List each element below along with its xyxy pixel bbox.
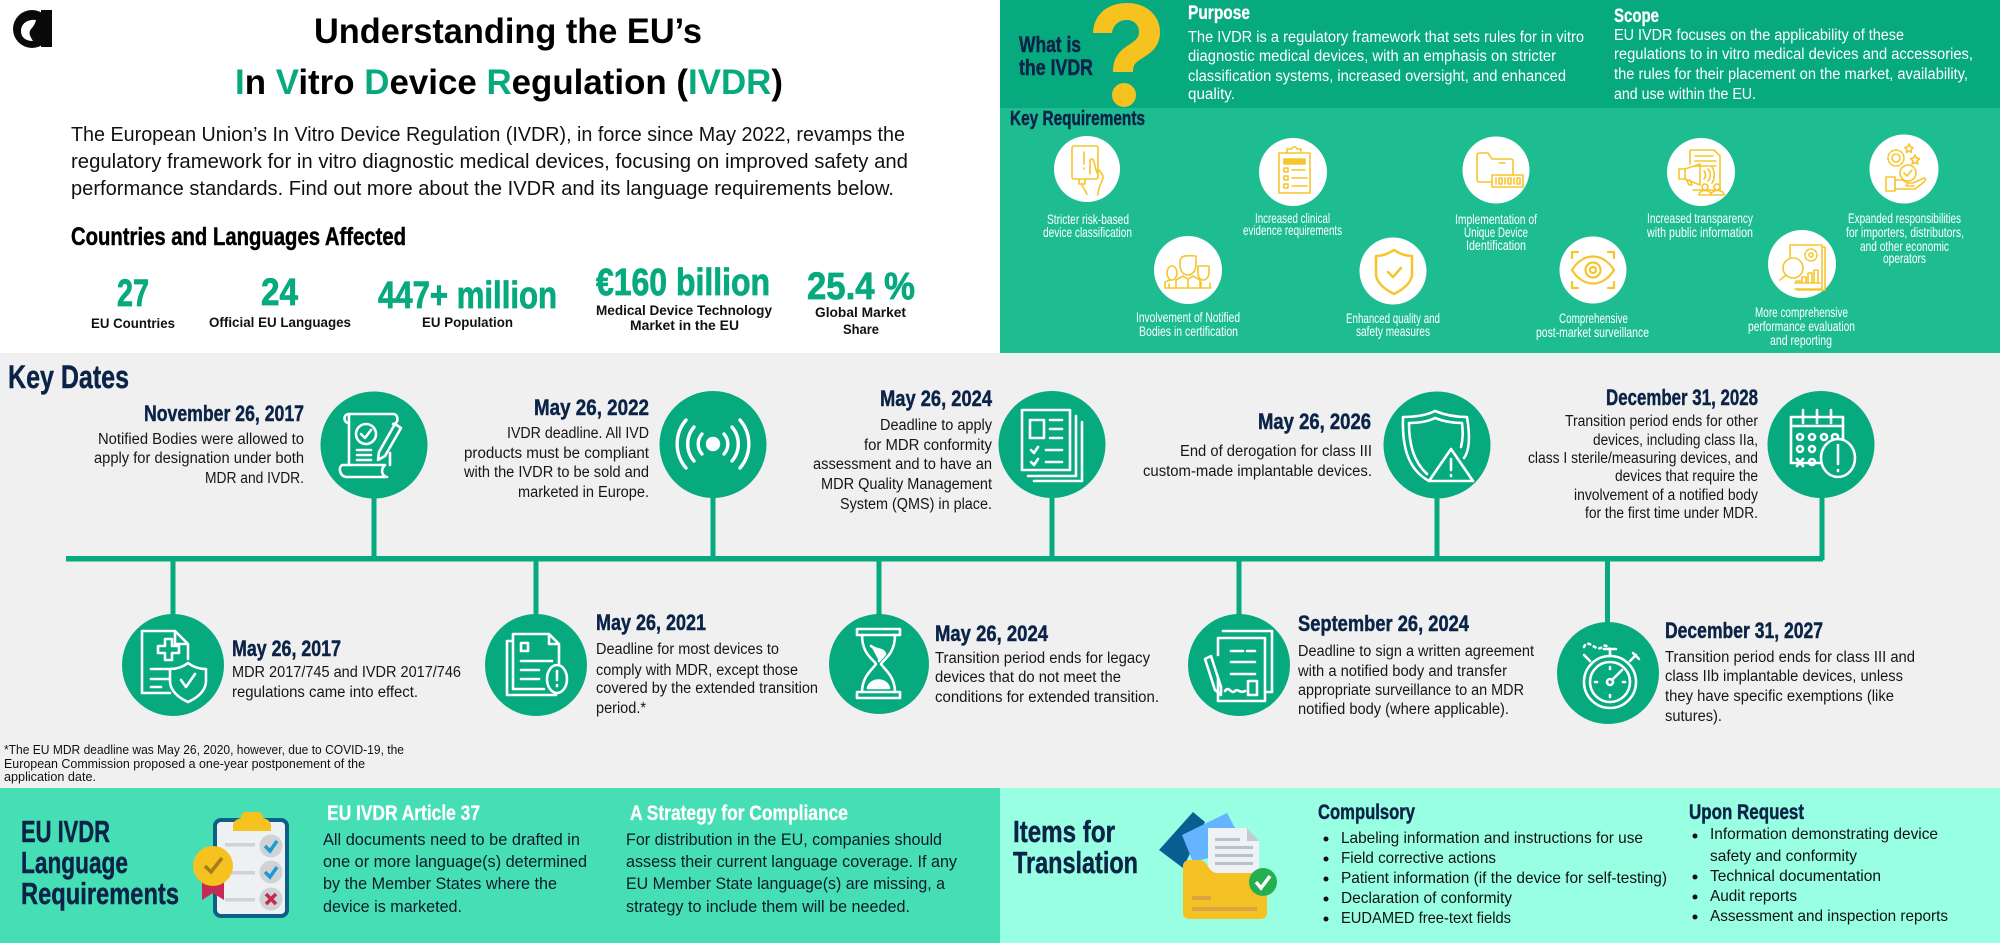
requirement: performance evaluation: performance evaluation — [1748, 318, 1855, 334]
requirement: notified bodies — [1136, 236, 1240, 339]
scope: Scope — [1614, 6, 1659, 27]
stat: population: EU Population — [422, 314, 513, 330]
date and description: IVDR deadline. All IVD — [507, 425, 649, 442]
scope — [1614, 6, 1973, 103]
purpose: quality. — [1188, 86, 1235, 103]
icon: signed contract — [1205, 631, 1272, 701]
requirement: risk-based classification: Stricter risk-based — [1047, 211, 1129, 227]
date and description — [1528, 385, 1758, 522]
date and description: products must be compliant — [464, 445, 650, 462]
icon: question mark — [1093, 3, 1160, 107]
compulsory list: Compulsory — [1318, 801, 1415, 824]
requirement: post-market surveillance: Comprehensive — [1559, 310, 1628, 326]
stat: 27 EU countries: 27 — [117, 273, 149, 315]
requirement: quality and safety: Enhanced quality and — [1346, 310, 1440, 326]
requirement: risk-based classification — [1043, 136, 1132, 240]
date and description: notified body (where applicable). — [1298, 701, 1509, 718]
heading: what is the IVDR: the IVDR — [1019, 55, 1093, 80]
date and description: class IIb implantable devices, unless — [1665, 668, 1903, 685]
date and description: MDR and IVDR. — [205, 470, 304, 487]
panel: what is the IVDR — [1000, 0, 2000, 108]
requirement: clinical evidence: Increased clinical — [1255, 210, 1330, 226]
stat: market: Medical Device Technology — [596, 302, 772, 318]
date and description: devices, including class IIa, — [1593, 432, 1758, 449]
title: In Vitro Device Regulation (IVDR) — [235, 63, 783, 102]
icon: shield check — [1376, 250, 1412, 294]
date and description: devices that do not meet the — [935, 669, 1121, 686]
date and description: Transition period ends for other — [1565, 413, 1758, 430]
requirement: transparency: Increased transparency — [1647, 210, 1753, 226]
icon: folder with documents — [1159, 812, 1277, 919]
icon: eye — [1572, 252, 1614, 288]
date and description: appropriate surveillance to an MDR — [1298, 682, 1524, 699]
date and description: involvement of a notified body — [1574, 487, 1758, 504]
EU IVDR Article 37: one or more language(s) determined — [323, 852, 587, 871]
scope: regulations to in vitro medical devices and accessories, — [1614, 46, 1973, 63]
compulsory list: Declaration of conformity — [1341, 890, 1512, 907]
stat: population — [378, 275, 557, 330]
heading: items for translation: Items for — [1013, 814, 1115, 849]
requirement: unique device identification: Implementation of — [1455, 211, 1537, 227]
title: Understanding the EU’s — [314, 12, 702, 51]
panel: introduction — [0, 0, 1000, 353]
requirement: performance evaluation: More comprehensive — [1755, 304, 1848, 320]
heading: items for translation: Translation — [1013, 845, 1138, 880]
requirement: quality and safety: safety measures — [1356, 323, 1430, 339]
intro paragraph: The European Union’s In Vitro Device Regulation (IVDR), in force since May 2022, revamps the — [71, 123, 905, 146]
event: November 26, 2017 — [94, 392, 428, 558]
compulsory list: EUDAMED free-text fields — [1341, 910, 1511, 927]
heading: language requirements: EU IVDR — [21, 814, 110, 849]
requirement: transparency — [1646, 138, 1753, 240]
purpose — [1188, 3, 1584, 103]
date and description — [935, 621, 1159, 706]
footnote — [4, 742, 404, 784]
requirement: unique device identification — [1455, 136, 1537, 253]
date and description: MDR 2017/745 and IVDR 2017/746 — [232, 664, 461, 681]
footnote: *The EU MDR deadline was May 26, 2020, however, due to COVID-19, the — [4, 742, 404, 757]
heading: key requirements: Key Requirements — [1010, 108, 1145, 130]
stat: 27 EU countries — [91, 273, 175, 331]
scope: EU IVDR focuses on the applicability of these — [1614, 27, 1904, 44]
requirement: risk-based classification: device classification — [1043, 224, 1132, 240]
upon request list: Technical documentation — [1710, 868, 1881, 885]
intro paragraph: performance standards. Find out more about the IVDR and its language requirements below. — [71, 177, 894, 200]
event: May 26, 2024 legacy — [829, 558, 1159, 714]
icon: gear, star and hand — [1886, 144, 1926, 191]
stat: 24 languages — [209, 272, 351, 330]
requirement: performance evaluation: and reporting — [1770, 332, 1832, 348]
title — [235, 12, 783, 102]
date and description: November 26, 2017 — [144, 401, 304, 426]
A Strategy for Compliance: For distribution in the EU, companies should — [626, 830, 942, 849]
logo — [13, 10, 52, 48]
EU IVDR Article 37: EU IVDR Article 37 — [327, 802, 480, 825]
panel: key requirements — [1000, 108, 2000, 353]
upon request list: Audit reports — [1710, 888, 1797, 905]
date and description — [463, 395, 650, 501]
upon request list: Upon Request — [1689, 801, 1804, 824]
event: May 26, 2021 — [485, 558, 818, 717]
scope: and use within the EU. — [1614, 86, 1756, 103]
requirement: quality and safety — [1346, 238, 1440, 339]
heading: language requirements: Language — [21, 845, 128, 880]
stat: population: 447+ million — [378, 275, 557, 317]
stat: 24 languages: Official EU Languages — [209, 314, 351, 330]
date and description: May 26, 2026 — [1258, 409, 1371, 434]
A Strategy for Compliance: EU Member State language(s) are missing, a — [626, 874, 946, 893]
event: May 26, 2017 — [122, 558, 461, 716]
EU IVDR Article 37: by the Member States where the — [323, 874, 557, 893]
EU IVDR Article 37: All documents need to be drafted in — [323, 830, 580, 849]
icon: folder with code — [1477, 153, 1523, 187]
stat: 24 languages: 24 — [261, 272, 298, 314]
requirement: unique device identification: Identification — [1466, 237, 1526, 253]
heading: what is the IVDR — [1019, 32, 1093, 80]
heading: key dates: Key Dates — [8, 359, 129, 395]
date and description: class I sterile/measuring devices, and — [1528, 450, 1758, 467]
stat: share: 25.4 % — [807, 266, 915, 308]
compulsory list — [1318, 801, 1667, 927]
upon request list: Information demonstrating device — [1710, 826, 1938, 843]
date and description: End of derogation for class III — [1180, 443, 1372, 460]
requirement: performance evaluation — [1748, 230, 1855, 348]
icon: document stack checklist — [1022, 410, 1082, 481]
requirement: post-market surveillance: post-market surveillance — [1536, 324, 1649, 340]
heading: countries and languages: Countries and Languages Affected — [71, 223, 406, 251]
stat: market — [596, 262, 772, 333]
heading: language requirements — [21, 814, 179, 911]
icon: document alert — [507, 634, 567, 695]
date and description: assessment and to have an — [813, 456, 992, 473]
upon request list: safety and conformity — [1710, 848, 1857, 865]
upon request list — [1689, 801, 1948, 925]
event: May 26, 2022 — [463, 391, 766, 558]
icon: hand holding device — [1072, 146, 1103, 195]
requirement: notified bodies: Bodies in certification — [1139, 323, 1238, 339]
intro paragraph — [71, 123, 908, 200]
EU IVDR Article 37 — [323, 802, 587, 916]
event: May 26, 2026 — [1143, 392, 1490, 558]
date and description: marketed in Europe. — [518, 484, 649, 501]
compulsory list: Patient information (if the device for self-testing) — [1341, 870, 1667, 887]
stat: market: €160 billion — [596, 262, 770, 304]
icon: people group — [1165, 256, 1211, 288]
icon: scroll and pen — [340, 414, 401, 477]
date and description: conditions for extended transition. — [935, 689, 1159, 706]
date and description: Deadline for most devices to — [596, 641, 779, 658]
date and description: Transition period ends for legacy — [935, 650, 1150, 667]
requirement: post-market surveillance — [1536, 236, 1649, 340]
date and description: Notified Bodies were allowed to — [98, 431, 304, 448]
intro paragraph: regulatory framework for in vitro diagnostic medical devices, focusing on improved safety and — [71, 150, 908, 173]
heading: items for translation — [1013, 814, 1138, 880]
icon: stopwatch — [1584, 644, 1639, 708]
date and description: period.* — [596, 700, 646, 717]
stat: share: Share — [843, 321, 879, 337]
date and description: with a notified body and transfer — [1297, 663, 1507, 680]
EU IVDR Article 37: device is marketed. — [323, 897, 462, 916]
date and description: covered by the extended transition — [596, 680, 818, 697]
date and description — [596, 610, 818, 717]
requirement: expanded responsibilities: operators — [1883, 250, 1926, 266]
date and description: for the first time under MDR. — [1585, 505, 1758, 522]
purpose: diagnostic medical devices, with an emphasis on stricter — [1188, 48, 1556, 65]
stat: market: Market in the EU — [630, 317, 739, 333]
A Strategy for Compliance: assess their current language coverage. If any — [626, 852, 957, 871]
compulsory list: Labeling information and instructions for use — [1341, 830, 1643, 847]
date and description: May 26, 2017 — [232, 636, 341, 661]
panel: items for translation — [1000, 788, 2000, 943]
icon: calendar alert — [1791, 410, 1855, 477]
event: December 31, 2028 — [1528, 385, 1874, 560]
event: December 31, 2027 — [1557, 558, 1915, 725]
icon: magnifier report — [1780, 245, 1825, 290]
date and description: devices that require the — [1615, 468, 1758, 485]
A Strategy for Compliance: A Strategy for Compliance — [630, 802, 848, 825]
A Strategy for Compliance — [626, 802, 957, 916]
heading: what is the IVDR: What is — [1019, 32, 1081, 57]
date and description: comply with MDR, except those — [596, 662, 798, 679]
panel: key dates — [0, 353, 2000, 788]
stat: 27 EU countries: EU Countries — [91, 315, 175, 331]
date and description — [232, 636, 461, 701]
date and description: May 26, 2024 — [935, 621, 1049, 646]
date and description: sutures). — [1665, 708, 1722, 725]
date and description: for MDR conformity — [864, 437, 992, 454]
icon: hourglass — [857, 629, 900, 698]
requirement: expanded responsibilities: for importers, distributors, — [1846, 224, 1964, 240]
date and description: May 26, 2021 — [596, 610, 706, 635]
date and description: MDR Quality Management — [821, 476, 993, 493]
upon request list: Assessment and inspection reports — [1710, 908, 1948, 925]
date and description: May 26, 2022 — [534, 395, 649, 420]
date and description: custom-made implantable devices. — [1143, 463, 1372, 480]
date and description — [1665, 618, 1915, 725]
date and description: May 26, 2024 — [880, 386, 993, 411]
date and description: apply for designation under both — [94, 450, 304, 467]
requirement: expanded responsibilities: and other economic — [1860, 238, 1949, 254]
panel: EU IVDR language requirements — [0, 788, 1000, 943]
date and description: regulations came into effect. — [232, 684, 418, 701]
date and description: Transition period ends for class III and — [1665, 649, 1915, 666]
date and description: September 26, 2024 — [1298, 611, 1470, 636]
A Strategy for Compliance: strategy to include them will be needed. — [626, 897, 910, 916]
icon: signal broadcast — [677, 420, 749, 468]
date and description — [813, 386, 993, 513]
date and description: with the IVDR to be sold and — [463, 464, 649, 481]
timeline axis — [66, 556, 1823, 562]
icon: shield warning — [1403, 411, 1473, 481]
requirement: transparency: with public information — [1646, 224, 1753, 240]
event: September 26, 2024 — [1188, 558, 1535, 718]
date and description: Deadline to apply — [880, 417, 992, 434]
footnote: European Commission proposed a one-year postponement of the — [4, 756, 365, 771]
purpose: classification systems, increased oversight, and enhanced — [1188, 68, 1566, 85]
heading: language requirements: Requirements — [21, 876, 179, 911]
date and description: they have specific exemptions (like — [1665, 688, 1894, 705]
footnote: application date. — [4, 769, 96, 784]
date and description — [1297, 611, 1535, 718]
scope: the rules for their placement on the market, availability, — [1614, 66, 1968, 83]
purpose: Purpose — [1188, 3, 1250, 24]
icon: clipboard checklist — [1279, 147, 1310, 193]
stat: share: Global Market — [815, 304, 906, 320]
icon: megaphone and document — [1679, 150, 1724, 195]
date and description: December 31, 2028 — [1606, 385, 1758, 410]
purpose: The IVDR is a regulatory framework that sets rules for in vitro — [1188, 29, 1584, 46]
compulsory list: Field corrective actions — [1341, 850, 1496, 867]
date and description: Deadline to sign a written agreement — [1298, 643, 1535, 660]
stat: share — [807, 266, 915, 337]
date and description — [1143, 409, 1372, 480]
icon: clipboard with medal — [193, 812, 287, 916]
date and description: December 31, 2027 — [1665, 618, 1823, 643]
requirement: clinical evidence — [1243, 138, 1342, 238]
requirement: unique device identification: Unique Device — [1464, 224, 1528, 240]
event: May 26, 2024 conformity — [813, 386, 1106, 558]
date and description: System (QMS) in place. — [840, 496, 992, 513]
date and description — [94, 401, 304, 487]
icon: medical document shield — [142, 631, 206, 702]
requirement: notified bodies: Involvement of Notified — [1136, 309, 1240, 325]
requirement: expanded responsibilities — [1846, 134, 1964, 266]
requirement: clinical evidence: evidence requirements — [1243, 222, 1342, 238]
